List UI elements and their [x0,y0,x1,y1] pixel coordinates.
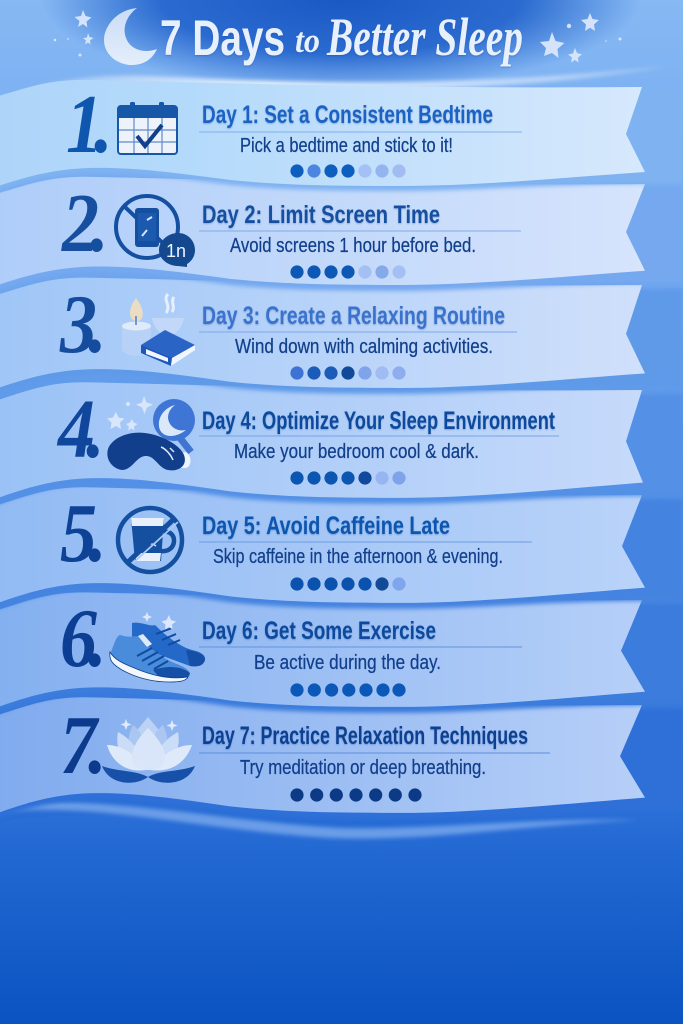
panel: day 5 [0,487,683,610]
progress dots [290,265,406,279]
panel: day 6 [0,592,683,714]
number 3: 3. [59,278,101,371]
description: Try meditation or deep breathing. [240,757,486,779]
description: Be active during the day. [254,652,441,674]
description: Wind down with calming activities. [235,336,493,358]
title [160,7,523,67]
panel: day 4 [0,382,683,505]
progress dots [290,788,422,802]
icon: sleep mask and moon [107,396,195,470]
panel: day 1 [0,78,683,192]
progress dots [290,164,406,178]
heading: Day 6: Get Some Exercise [202,617,436,645]
icon: lotus [102,717,195,783]
heading: Day 3: Create a Relaxing Routine [202,302,505,330]
title: to [295,21,320,60]
progress dots [290,366,406,380]
title: Better Sleep [326,7,523,67]
number 7: 7. [60,699,101,792]
description: Make your bedroom cool & dark. [234,441,479,463]
icon: no phone, 1 hour: 1n [166,241,186,261]
progress dots [290,471,406,485]
description: Skip caffeine in the afternoon & evening. [213,546,503,568]
top light wave [0,66,670,100]
description: Avoid screens 1 hour before bed. [230,235,476,257]
icon: no caffeine [118,508,182,572]
description: Pick a bedtime and stick to it! [240,135,453,157]
heading: Day 4: Optimize Your Sleep Environment [202,407,555,435]
progress dots [290,577,406,591]
number 2: 2. [61,177,103,270]
number 6: 6. [60,592,101,685]
panel: day 7 [0,697,683,820]
number 1: 1. [66,78,107,171]
bottom waves [0,801,683,1024]
icon: running shoes [110,612,205,682]
progress dots [290,683,406,697]
panel: day 2 [0,177,683,292]
heading: Day 1: Set a Consistent Bedtime [202,101,493,129]
title moon [104,8,157,65]
heading: Day 7: Practice Relaxation Techniques [202,722,528,750]
number 4: 4. [56,383,99,476]
heading: Day 5: Avoid Caffeine Late [202,512,450,540]
icon: calendar with check [118,102,177,154]
title: 7 Days [160,10,285,66]
icon: candle, tea and book [122,294,195,366]
number 5: 5. [60,487,101,580]
title stars [54,10,621,62]
heading: Day 2: Limit Screen Time [202,201,440,229]
panel: day 3 [0,278,683,395]
icon: no phone, 1 hour [116,196,195,267]
